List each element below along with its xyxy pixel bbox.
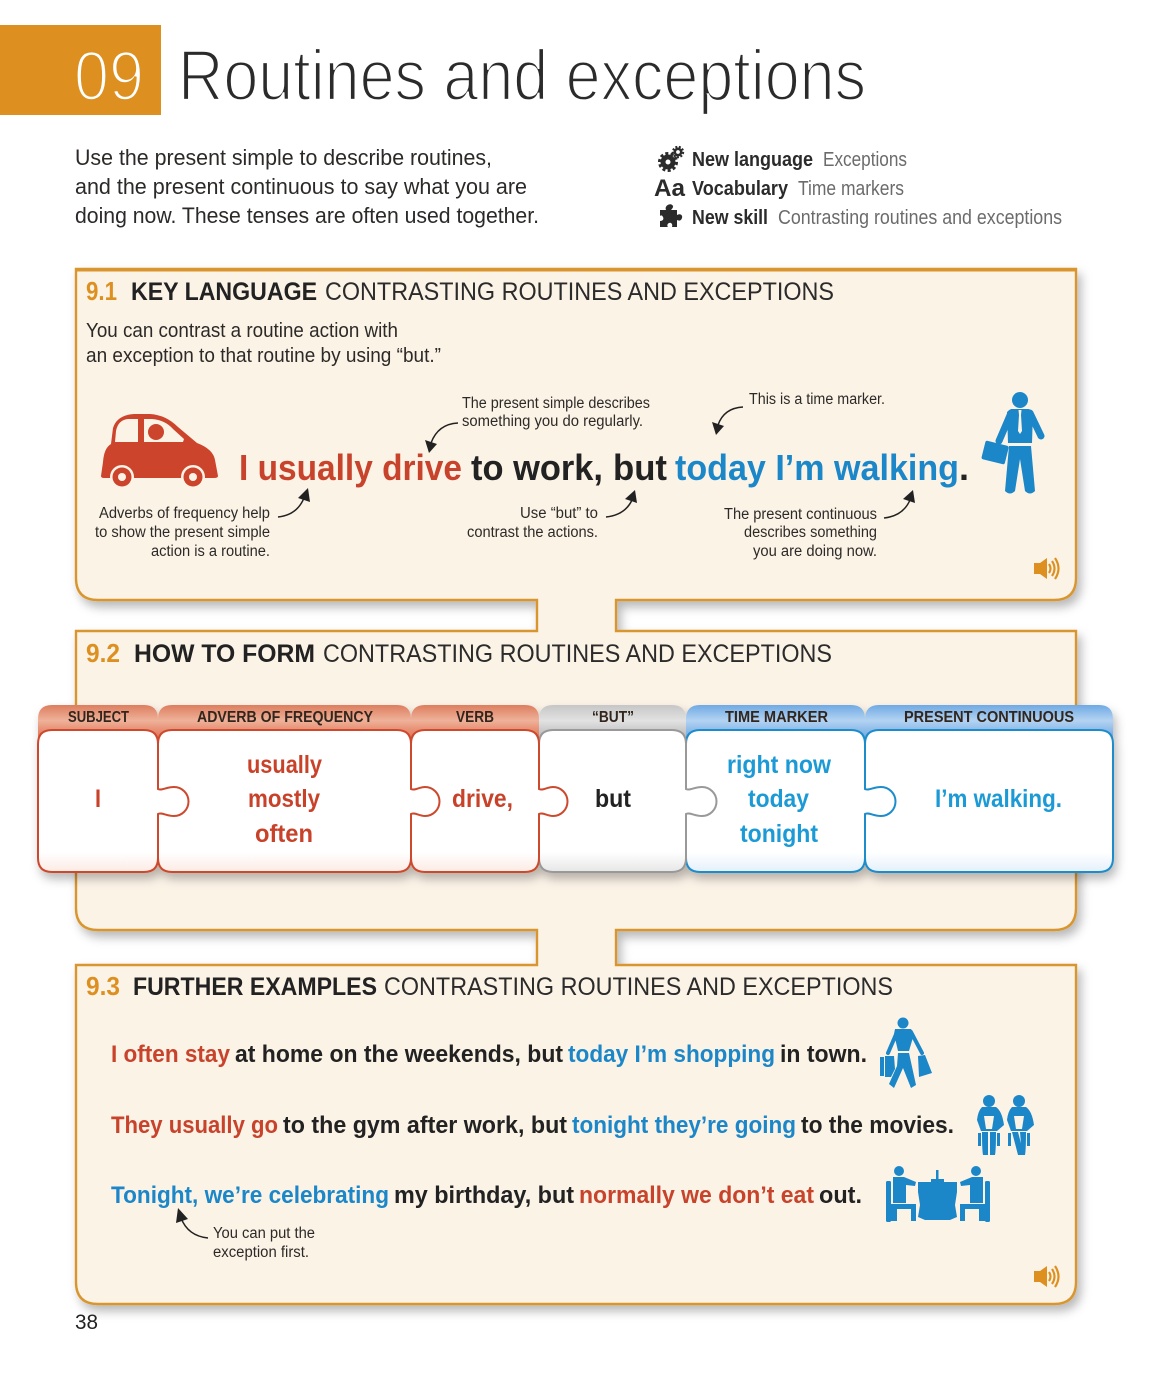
piece: adverb of frequency: mostly xyxy=(248,785,320,813)
piece: time marker: right now xyxy=(727,751,832,779)
new skill: New skill xyxy=(692,207,768,229)
piece: verb: VERB xyxy=(456,709,494,726)
intro text: Use the present simple to describe routines, xyxy=(75,145,492,170)
annotation: adverbs of frequency: Adverbs of frequency help xyxy=(99,505,270,522)
panel: 9.1 key language xyxy=(86,276,1058,579)
heading 9.1: KEY LANGUAGE xyxy=(131,278,317,306)
arrow: to walking xyxy=(884,490,915,518)
example sentence 2: to the gym after work, but xyxy=(283,1112,567,1139)
piece: but: “BUT” xyxy=(592,709,634,726)
page number: 38 xyxy=(75,1311,98,1334)
annotation: present continuous: describes something xyxy=(744,524,877,541)
example sentence 2: to the movies. xyxy=(801,1112,954,1139)
icon: audio xyxy=(1034,1266,1058,1287)
heading 9.2 xyxy=(86,638,832,668)
piece: verb xyxy=(411,705,568,872)
key sentence: . xyxy=(959,447,969,488)
heading 9.1 xyxy=(86,276,834,306)
annotation: exception first: exception first. xyxy=(213,1244,309,1261)
example sentence 2 xyxy=(111,1112,954,1139)
heading 9.2: CONTRASTING ROUTINES AND EXCEPTIONS xyxy=(323,640,832,668)
example sentence 3 xyxy=(111,1182,862,1209)
icon: audio xyxy=(1034,558,1058,579)
annotation: but xyxy=(467,505,598,541)
arrow: to Tonight xyxy=(176,1208,208,1238)
piece: present continuous xyxy=(865,705,1113,872)
vocabulary xyxy=(692,178,904,200)
icon: car xyxy=(101,414,218,489)
icon: moviegoers xyxy=(977,1095,1034,1155)
key sentence xyxy=(239,447,969,488)
piece: but: but xyxy=(595,785,632,813)
example sentence 2: tonight they’re going xyxy=(572,1112,796,1139)
new skill: Contrasting routines and exceptions xyxy=(778,207,1062,229)
vocabulary: Time markers xyxy=(798,178,904,200)
heading 9.3 xyxy=(86,971,893,1001)
annotation: adverbs of frequency: action is a routine. xyxy=(151,543,270,560)
piece: time marker: tonight xyxy=(740,820,819,848)
description xyxy=(86,320,441,367)
key sentence: to work, xyxy=(471,447,603,488)
example sentence 3: out. xyxy=(819,1182,862,1209)
arrow: to drive xyxy=(425,423,458,453)
example sentence 3: Tonight, we’re celebrating xyxy=(111,1182,389,1209)
new language xyxy=(692,149,907,171)
piece: present continuous: I’m walking. xyxy=(935,785,1062,813)
panels background with connectors xyxy=(76,269,1076,1304)
example sentence 1: I often stay xyxy=(111,1041,231,1068)
heading 9.3: CONTRASTING ROUTINES AND EXCEPTIONS xyxy=(384,973,893,1001)
arrow: to usually xyxy=(278,488,310,517)
annotation: present simple: The present simple describes xyxy=(462,395,650,412)
heading 9.2: HOW TO FORM xyxy=(134,640,315,668)
piece: subject: I xyxy=(95,785,101,813)
piece: subject: SUBJECT xyxy=(68,709,129,726)
intro text xyxy=(75,145,539,228)
key sentence: but xyxy=(613,447,667,488)
icon: puzzle piece xyxy=(660,204,682,227)
annotation: exception first: You can put the xyxy=(213,1225,315,1242)
annotation: present continuous: The present continuous xyxy=(724,506,877,523)
piece: subject xyxy=(38,705,188,872)
key sentence: today I’m walking xyxy=(675,447,959,488)
annotation: time marker: This is a time marker. xyxy=(749,391,885,408)
annotation: exception first xyxy=(213,1225,315,1261)
intro text: doing now. These tenses are often used together. xyxy=(75,203,539,228)
annotation: present simple xyxy=(462,395,650,430)
icon: businessman xyxy=(981,392,1041,494)
chapter number tab xyxy=(0,25,161,115)
example sentence 3: my birthday, but xyxy=(394,1182,574,1209)
heading 9.2: 9.2 xyxy=(86,638,120,668)
heading 9.3: 9.3 xyxy=(86,971,120,1001)
heading 9.1: 9.1 xyxy=(86,276,117,306)
icon: dinner table xyxy=(886,1166,990,1222)
piece: adverb of frequency: usually xyxy=(247,751,322,779)
annotation: present simple: something you do regularly. xyxy=(462,413,643,430)
intro text: and the present continuous to say what you are xyxy=(75,174,527,199)
icon: Aa: Aa xyxy=(654,175,686,202)
chapter number tab: 09 xyxy=(74,37,144,115)
title: Routines and exceptions xyxy=(178,37,866,116)
annotation: adverbs of frequency xyxy=(95,505,270,560)
example sentence 2: They usually go xyxy=(111,1112,278,1139)
piece: time marker: TIME MARKER xyxy=(725,709,828,726)
key sentence: I usually drive xyxy=(239,447,462,488)
piece: present continuous: PRESENT CONTINUOUS xyxy=(904,709,1074,726)
annotation: adverbs of frequency: to show the present simple xyxy=(95,524,270,541)
example sentence 3: normally we don’t eat xyxy=(579,1182,814,1209)
piece: time marker xyxy=(686,705,896,872)
panel: 9.3 further examples xyxy=(86,971,1058,1287)
example sentence 1 xyxy=(111,1041,867,1068)
panel: 9.2 how to form xyxy=(38,638,1113,872)
vocabulary: Vocabulary xyxy=(692,178,789,200)
icon: shopper xyxy=(880,1018,932,1088)
learning objectives xyxy=(654,147,1062,229)
example sentence 1: at home on the weekends, but xyxy=(235,1041,563,1068)
piece: time marker: today xyxy=(748,785,809,813)
heading 9.1: CONTRASTING ROUTINES AND EXCEPTIONS xyxy=(325,278,834,306)
annotation: present continuous: you are doing now. xyxy=(753,543,877,560)
piece: adverb of frequency xyxy=(158,705,440,872)
piece: adverb of frequency: ADVERB OF FREQUENCY xyxy=(197,709,373,726)
puzzle table xyxy=(38,705,1113,872)
annotation: but: contrast the actions. xyxy=(467,524,598,541)
arrow: to but xyxy=(606,490,637,517)
annotation: but: Use “but” to xyxy=(520,505,598,522)
piece: but xyxy=(539,705,716,872)
new language: New language xyxy=(692,149,813,171)
description: an exception to that routine by using “but.” xyxy=(86,345,441,367)
icon: gears xyxy=(660,147,683,170)
heading 9.3: FURTHER EXAMPLES xyxy=(133,973,377,1001)
new language: Exceptions xyxy=(823,149,907,171)
example sentence 1: in town. xyxy=(780,1041,867,1068)
piece: verb: drive, xyxy=(452,785,513,813)
arrow: to today xyxy=(712,407,743,435)
description: You can contrast a routine action with xyxy=(86,320,398,342)
annotation: present continuous xyxy=(724,506,877,560)
piece: adverb of frequency: often xyxy=(255,820,313,848)
example sentence 1: today I’m shopping xyxy=(568,1041,775,1068)
